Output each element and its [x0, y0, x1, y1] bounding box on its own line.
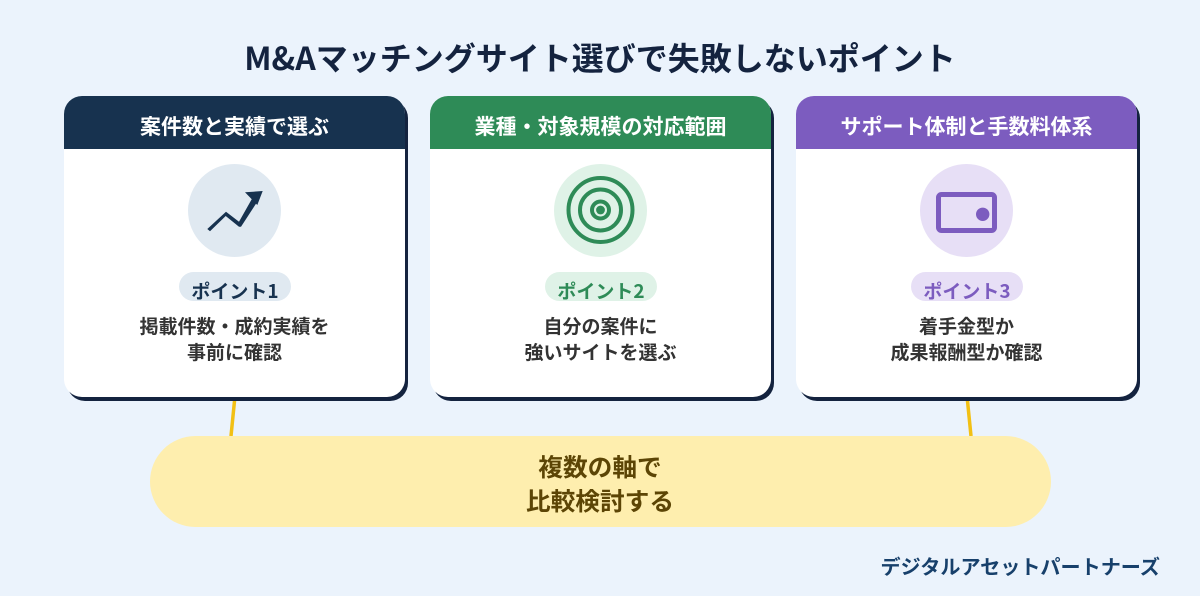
text: point 1 description [139, 312, 330, 365]
text: point 1 description: 事前に確認 [187, 338, 282, 365]
callout text [526, 448, 674, 518]
panel: point 1 [64, 96, 405, 397]
connector: left [229, 401, 236, 436]
callout: compare on multiple axes [150, 436, 1051, 527]
panel header: point 1 [64, 96, 405, 149]
badge: point 2 [545, 272, 657, 301]
callout text: 複数の軸で [538, 448, 662, 484]
panel header: point 3 [796, 96, 1137, 149]
badge: point 1 [179, 272, 291, 301]
text: point 2 description: 自分の案件に [543, 312, 658, 339]
text: point 2 description [524, 312, 676, 365]
panel: point 2 [430, 96, 771, 397]
panel header: point 1: 案件数と実績で選ぶ [140, 111, 329, 141]
callout text: 比較検討する [526, 482, 674, 518]
text: point 3 description [890, 312, 1042, 365]
icon: rising trend arrow [188, 164, 281, 257]
icon: target [554, 164, 647, 257]
text: point 1 description: 掲載件数・成約実績を [139, 312, 330, 339]
text: point 3 description: 成果報酬型か確認 [890, 338, 1042, 365]
footer brand: デジタルアセットパートナーズ [880, 551, 1160, 580]
panel header: point 2 [430, 96, 771, 149]
connector: right [966, 401, 973, 436]
panel header: point 2: 業種・対象規模の対応範囲 [474, 111, 726, 141]
text: point 3 description: 着手金型か [919, 312, 1014, 339]
panel: point 3 [796, 96, 1137, 397]
panel header: point 3: サポート体制と手数料体系 [840, 111, 1092, 141]
text: point 2 description: 強いサイトを選ぶ [524, 338, 676, 365]
icon: wallet [920, 164, 1013, 257]
badge: point 3 [911, 272, 1023, 301]
title: M&Aマッチングサイト選びで失敗しないポイント [244, 34, 956, 80]
